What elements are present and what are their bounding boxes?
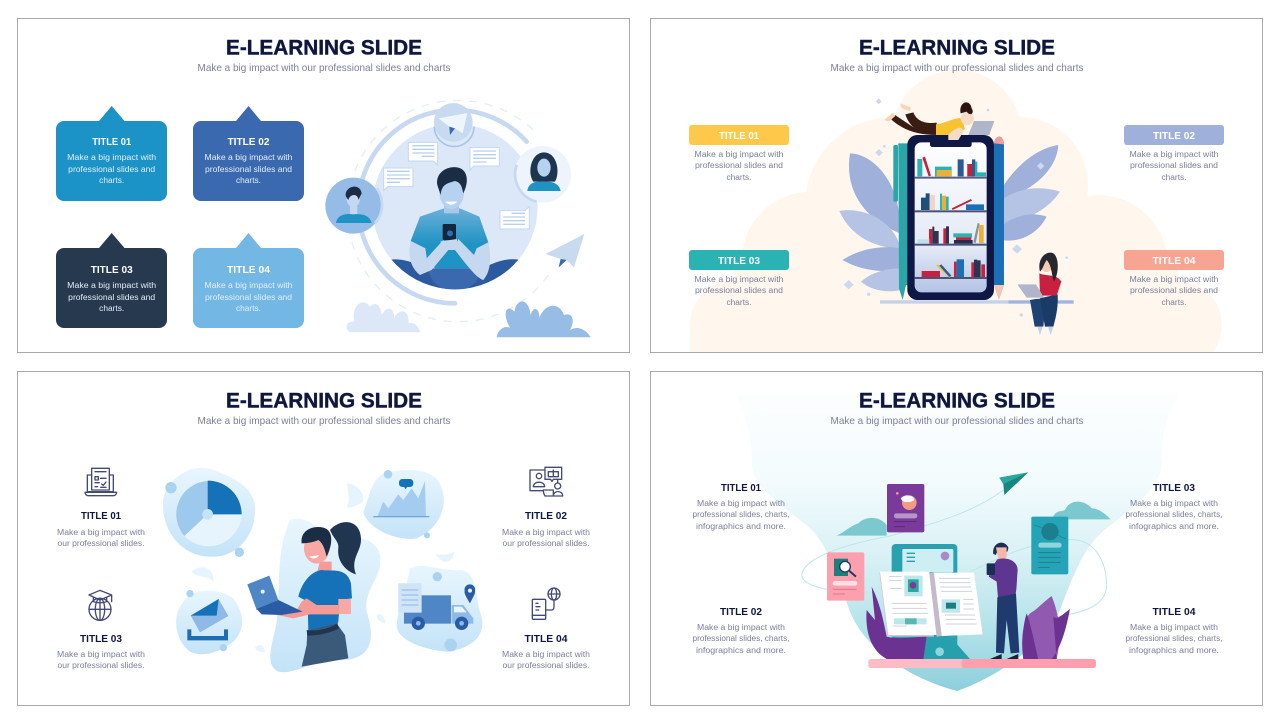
heading: panel 3 title: E-LEARNING SLIDE xyxy=(226,390,422,412)
item: title 02: professional slides, charts, xyxy=(692,634,790,643)
callout: title 03: Make a big impact with xyxy=(67,281,156,290)
item: title 02: our professional slides. xyxy=(502,539,590,548)
item: title 01: our professional slides. xyxy=(58,539,144,548)
item: title 04: professional slides, charts, xyxy=(1126,634,1222,643)
label: title 03: professional slides and xyxy=(695,286,783,295)
callout: title 03 xyxy=(56,233,167,328)
label: title 04: professional slides and xyxy=(1130,286,1218,295)
panel: boxes and phone user xyxy=(18,18,630,352)
item: title 03: our professional slides. xyxy=(58,661,144,670)
icon: online tutor xyxy=(530,467,563,496)
callout: title 03: charts. xyxy=(99,304,124,313)
callout: title 01: TITLE 01 xyxy=(92,136,131,148)
item: title 01: Make a big impact with xyxy=(57,528,145,537)
item: title 03: TITLE 03 xyxy=(1153,482,1195,494)
callout: title 04: TITLE 04 xyxy=(227,264,270,276)
subtitle: panel 1: Make a big impact with our professional slides and charts xyxy=(198,62,450,74)
item: title 01: Make a big impact with xyxy=(697,499,785,508)
callout: title 04 xyxy=(193,233,304,328)
callout: title 04: charts. xyxy=(236,304,261,313)
heading: panel 1 title: E-LEARNING SLIDE xyxy=(226,36,422,60)
label: title 01 xyxy=(689,125,789,182)
callout: title 03: professional slides and xyxy=(68,293,155,302)
callout: title 02: professional slides and xyxy=(205,165,292,174)
label: title 03: TITLE 03 xyxy=(718,255,760,267)
item: title 04: our professional slides. xyxy=(502,661,590,670)
icon: e-book and globe xyxy=(532,588,560,619)
item: title 02: infographics and more. xyxy=(696,646,786,655)
illustration: phone bookshelf with readers xyxy=(839,98,1074,335)
icon: laptop checklist xyxy=(85,468,117,496)
callout: title 01: charts. xyxy=(99,176,124,185)
item: title 04: Make a big impact with xyxy=(502,650,590,659)
item: title 04: Make a big impact with xyxy=(1130,623,1218,632)
item: title 03: professional slides, charts, xyxy=(1126,510,1222,519)
panel: open book xyxy=(650,372,1262,706)
item: title 02: Make a big impact with xyxy=(697,623,785,632)
label: title 01: TITLE 01 xyxy=(719,130,759,142)
label: title 04 xyxy=(1124,250,1224,307)
item: title 04: TITLE 04 xyxy=(524,633,568,645)
label: title 02: TITLE 02 xyxy=(1153,130,1195,142)
item: title 03: Make a big impact with xyxy=(57,650,145,659)
item: title 04: infographics and more. xyxy=(1129,646,1219,655)
illustration: woman with laptop and data blobs xyxy=(163,468,482,672)
subtitle: panel 3: Make a big impact with our professional slides and charts xyxy=(198,415,450,427)
subtitle: panel 4: Make a big impact with our professional slides and charts xyxy=(830,415,1084,427)
label: title 01: Make a big impact with xyxy=(694,150,784,159)
callout: title 01 xyxy=(56,106,167,201)
item: title 02: TITLE 02 xyxy=(525,510,567,522)
label: title 03: charts. xyxy=(726,298,752,307)
illustration: man with phone in circle xyxy=(325,100,591,337)
label: title 04: TITLE 04 xyxy=(1152,255,1196,267)
heading: panel 2 title: E-LEARNING SLIDE xyxy=(859,36,1055,60)
callout: title 02: charts. xyxy=(236,176,261,185)
panel: phone bookshelf xyxy=(650,18,1262,370)
item: title 01: TITLE 01 xyxy=(81,510,121,522)
callout: title 03: TITLE 03 xyxy=(91,264,133,276)
panel: analytics woman xyxy=(18,372,630,706)
item: title 04 xyxy=(1126,606,1222,655)
illustration: reader with open book and cards xyxy=(802,472,1111,668)
icon: graduation globe xyxy=(89,590,112,620)
label: title 04: charts. xyxy=(1162,298,1186,307)
label: title 01: charts. xyxy=(726,173,752,182)
item: title 03: TITLE 03 xyxy=(80,633,122,645)
callout: title 04: professional slides and xyxy=(205,293,292,302)
subtitle: panel 2: Make a big impact with our professional slides and charts xyxy=(830,62,1084,74)
item: title 04 xyxy=(502,588,590,670)
label: title 02: professional slides and xyxy=(1130,161,1218,170)
item: title 03 xyxy=(57,590,145,670)
callout: title 02: Make a big impact with xyxy=(204,153,292,162)
heading: panel 4 title: E-LEARNING SLIDE xyxy=(859,390,1055,412)
item: title 01: professional slides, charts, xyxy=(692,510,790,519)
callout: title 02 xyxy=(193,106,304,201)
callout: title 01: professional slides and xyxy=(68,165,155,174)
background: peach cloud xyxy=(690,70,1222,370)
item: title 02: Make a big impact with xyxy=(502,528,590,537)
item: title 03: Make a big impact with xyxy=(1130,499,1218,508)
item: title 04: TITLE 04 xyxy=(1152,606,1196,618)
item: title 02 xyxy=(502,467,590,548)
label: title 02: Make a big impact with xyxy=(1130,150,1218,159)
item: title 03 xyxy=(1126,482,1222,531)
item: title 03: infographics and more. xyxy=(1129,522,1219,531)
label: title 02 xyxy=(1124,125,1224,182)
item: title 02 xyxy=(692,606,790,655)
callout: title 02: TITLE 02 xyxy=(228,136,270,148)
label: title 03 xyxy=(689,250,789,307)
label: title 04: Make a big impact with xyxy=(1130,275,1218,284)
item: title 01: TITLE 01 xyxy=(721,482,761,494)
callout: title 04: Make a big impact with xyxy=(204,281,292,290)
label: title 02: charts. xyxy=(1162,173,1186,182)
item: title 01: infographics and more. xyxy=(696,522,786,531)
item: title 01 xyxy=(57,468,145,548)
label: title 01: professional slides and xyxy=(695,161,783,170)
callout: title 01: Make a big impact with xyxy=(67,153,156,162)
background: aqua blob xyxy=(735,392,1180,691)
item: title 01 xyxy=(692,482,790,531)
label: title 03: Make a big impact with xyxy=(694,275,784,284)
item: title 02: TITLE 02 xyxy=(720,606,762,618)
